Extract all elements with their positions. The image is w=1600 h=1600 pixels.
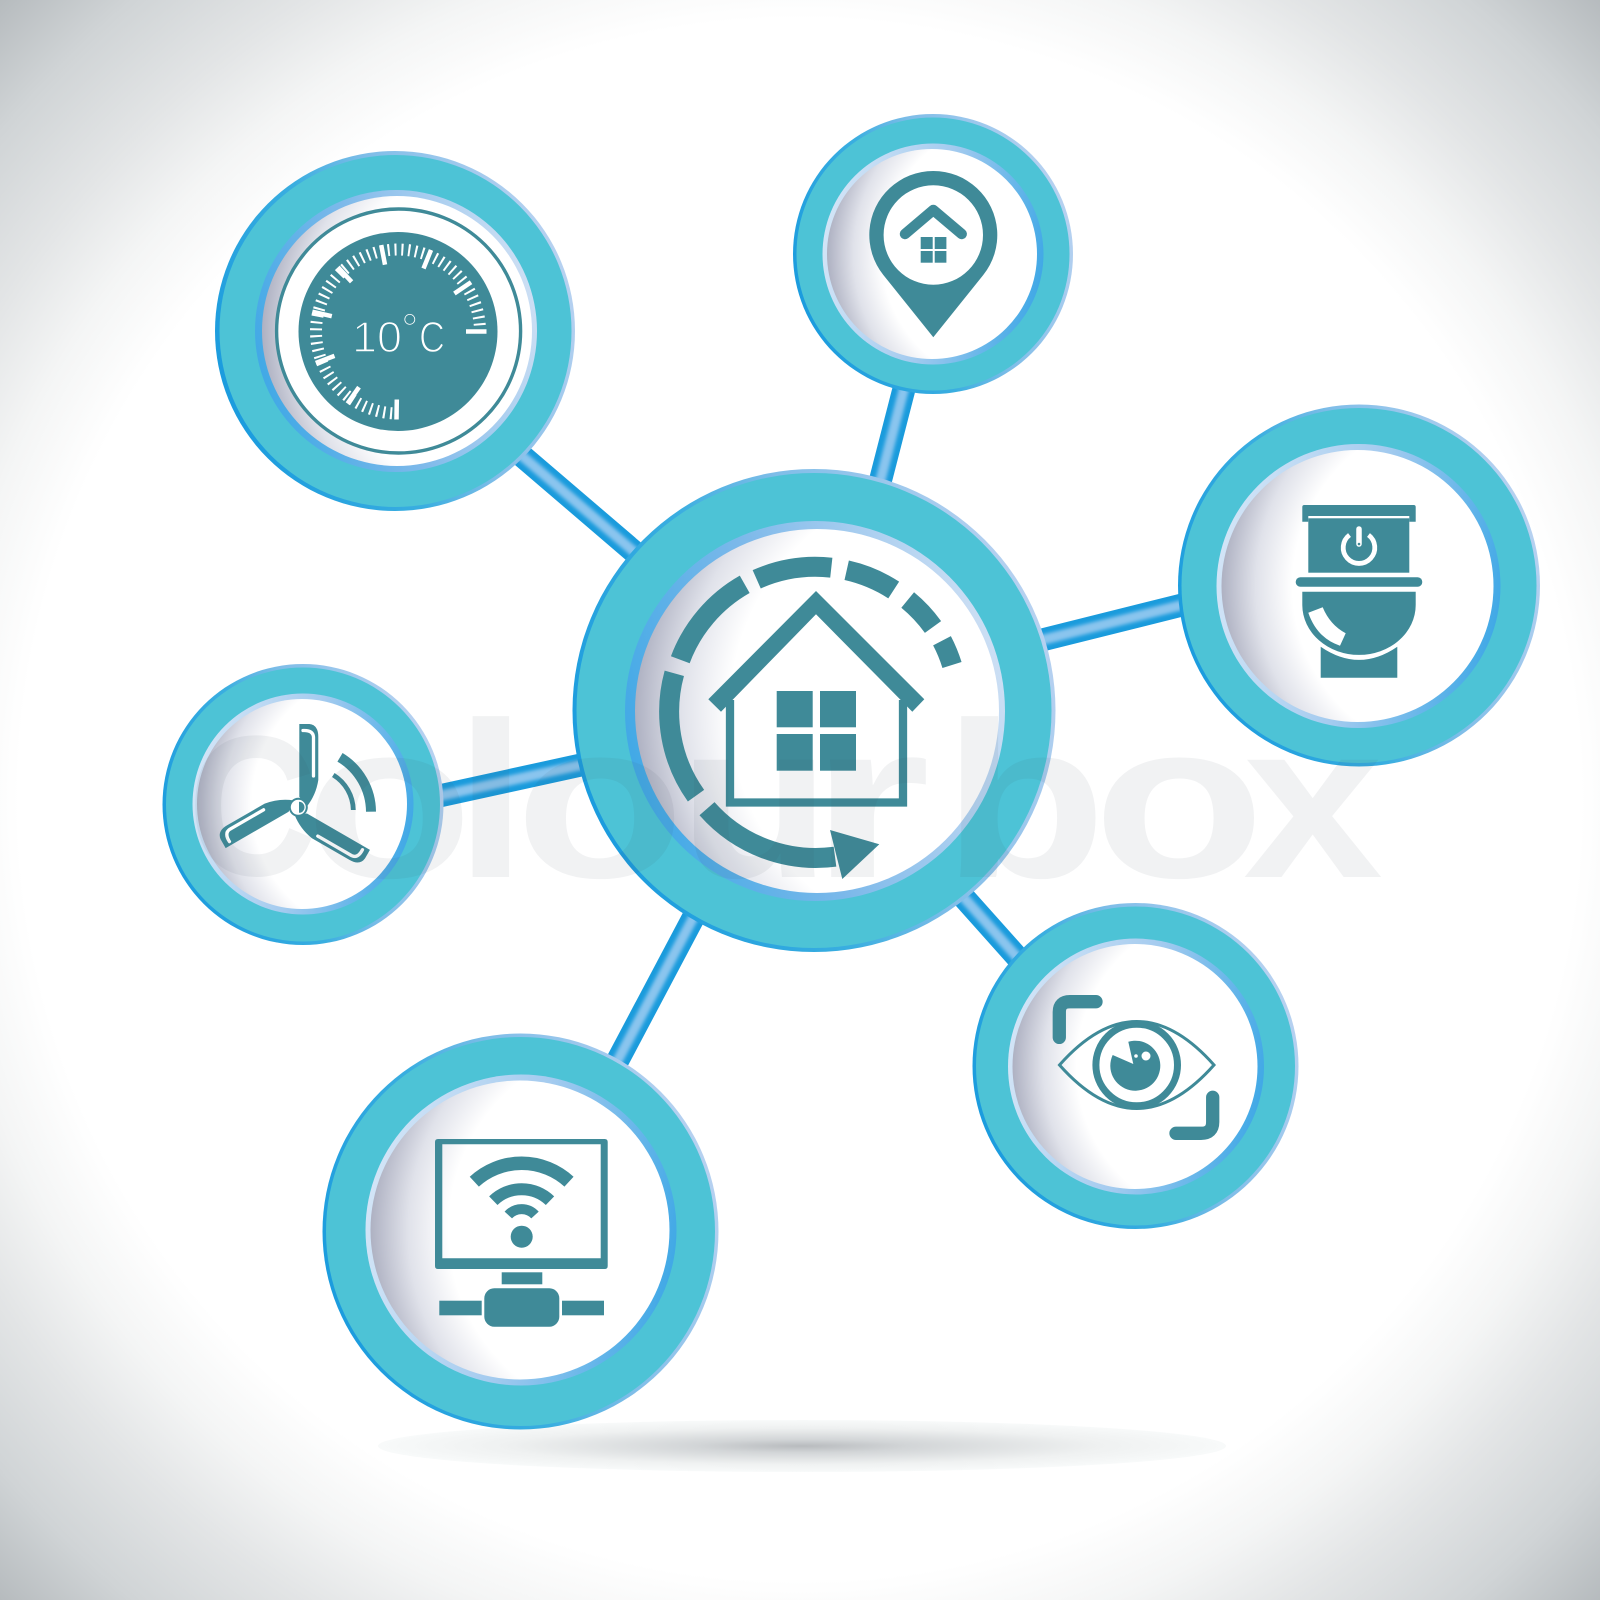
icon: cycle arrow <box>669 567 952 879</box>
dial reading: C <box>419 313 445 362</box>
icon: toilet with power button <box>1296 505 1422 678</box>
icon: monitor with wifi and network <box>435 1139 608 1327</box>
watermark: r <box>810 677 930 925</box>
node: smart toilet <box>1178 404 1540 766</box>
connectors <box>430 385 1190 1075</box>
watermark: u <box>678 677 831 925</box>
watermark <box>188 677 1383 925</box>
node: wifi monitor <box>322 1034 718 1430</box>
icon: location pin with house <box>869 171 997 337</box>
icon: fan blades and signal <box>216 724 371 866</box>
dial reading: ° <box>401 305 419 354</box>
icon: house <box>708 591 924 802</box>
dial reading <box>352 305 445 362</box>
watermark: o <box>1093 677 1265 925</box>
node: thermostat <box>215 151 575 511</box>
node: fan <box>162 664 444 945</box>
dial reading: 10 <box>352 313 402 362</box>
node: central smart home <box>572 469 1056 952</box>
icon: eye with focus brackets <box>1059 1002 1214 1133</box>
floor shadow <box>378 1420 1226 1472</box>
watermark: x <box>1243 677 1383 925</box>
watermark: l <box>454 677 528 925</box>
icon: thermostat dial <box>277 209 521 453</box>
watermark: o <box>515 677 685 925</box>
node: eye scanner <box>972 903 1298 1229</box>
watermark: o <box>305 677 473 925</box>
watermark: C <box>188 695 316 918</box>
watermark: b <box>942 677 1106 925</box>
node: home location pin <box>793 114 1073 394</box>
